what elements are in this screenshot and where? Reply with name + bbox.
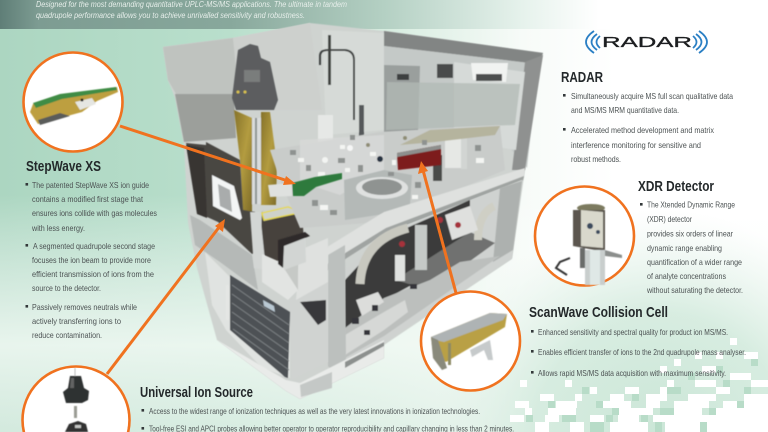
header band [0,0,768,29]
ion source bullets: Access to the widest range of ionization techniques as well as the very latest innovations in ionization technologies. [149,406,480,416]
xdr bullets: of analyte concentrations [647,271,726,281]
stepwave bullets: contains a modified first stage that [32,194,144,204]
panel: xdr detector [535,178,743,295]
radar bullets: and MS/MS MRM quantitative data. [571,105,679,115]
heading: radar: RADAR [561,69,603,86]
scanwave bullets: Allows rapid MS/MS data acquisition with maximum sensitivity. [538,368,726,378]
heading: xdr detector: XDR Detector [638,178,714,195]
panel: radar [561,31,733,164]
stepwave bullets: reduce contamination. [32,330,102,340]
ion source bullets [142,406,514,432]
icon: scanwave part [431,313,507,370]
ion source circle [22,366,130,432]
mid deck beam [298,168,525,288]
stepwave bullets: actively transferring ions to [32,316,121,326]
xdr bullets: The Xtended Dynamic Range [647,200,735,210]
xdr bullets: dynamic range enabling [647,243,722,253]
xdr bullets: provides six orders of linear [647,228,733,238]
header text: quadrupole performance allows you to achieve unrivalled sensitivity and robustness. [36,10,305,20]
stepwave bullets: A segmented quadrupole second stage [33,241,155,251]
scanwave circle [421,292,520,390]
icon: xdr detector part [556,204,622,285]
stepwave bullets: Passively removes neutrals while [32,302,137,312]
scanwave bullets [531,327,746,378]
scanwave bullets: Enhanced sensitivity and spectral quality for product ion MS/MS. [538,327,728,337]
icon: stepwave ion guide [30,87,118,125]
panel: universal ion source [22,366,514,432]
stepwave bullets: with less energy. [31,223,85,233]
heading: stepwave xs: StepWave XS [26,158,101,175]
xdr bullets: (XDR) detector [647,214,692,224]
radar bullets [563,91,733,164]
xdr circle [535,186,634,286]
turbo pump housing [232,44,278,110]
panel: stepwave callout [24,52,157,340]
upper left hood [163,23,543,170]
header text [36,0,347,20]
radar bullets: robust methods. [571,154,621,164]
stepwave bullets: source to the detector. [32,283,101,293]
stepwave bullets [26,180,157,340]
machine silhouette [163,23,543,399]
centre bay [262,232,328,379]
icon: radar logo: RADAR [602,35,692,51]
panel: scanwave collision cell [421,292,746,390]
stepwave bullets: The patented StepWave XS ion guide [32,180,149,190]
radar bullets: Accelerated method development and matrix [571,125,715,135]
instrument cutaway illustration [163,23,543,399]
radar bullets: Simultaneously acquire MS full scan qualitative data [571,91,733,101]
pixel pattern [510,338,768,432]
gold column [234,110,277,212]
stepwave bullets: focuses the ion beam to provide more [32,255,151,265]
icon: radar logo [586,31,707,53]
xdr bullets: quantification of a wider range [647,257,742,267]
arrow: scanwave [418,161,456,293]
xdr bullets: without saturating the detector. [646,285,743,295]
lower bay [345,180,522,364]
xdr bullets [640,200,743,295]
analyser assembly [270,125,505,228]
arrow: ion source [107,219,225,374]
stepwave part in situ [268,173,342,197]
scanwave red cell [397,145,441,170]
arrow: stepwave [120,126,296,185]
stepwave circle [24,52,122,152]
heading: universal ion source: Universal Ion Source [140,384,253,401]
ion source box [250,205,306,270]
heading: scanwave collision cell: ScanWave Collision Cell [529,304,668,321]
source housing [186,142,258,290]
base plinth [217,340,384,399]
vertical frame post [328,245,346,374]
radar bullets: interference monitoring for sensitive and [571,140,701,150]
stepwave bullets: ensures ions collide with gas molecules [32,208,157,218]
stepwave bullets: efficient transmission of ions from the [32,269,154,279]
louvred side panel [205,252,290,378]
icon: ion source probes [63,368,89,432]
